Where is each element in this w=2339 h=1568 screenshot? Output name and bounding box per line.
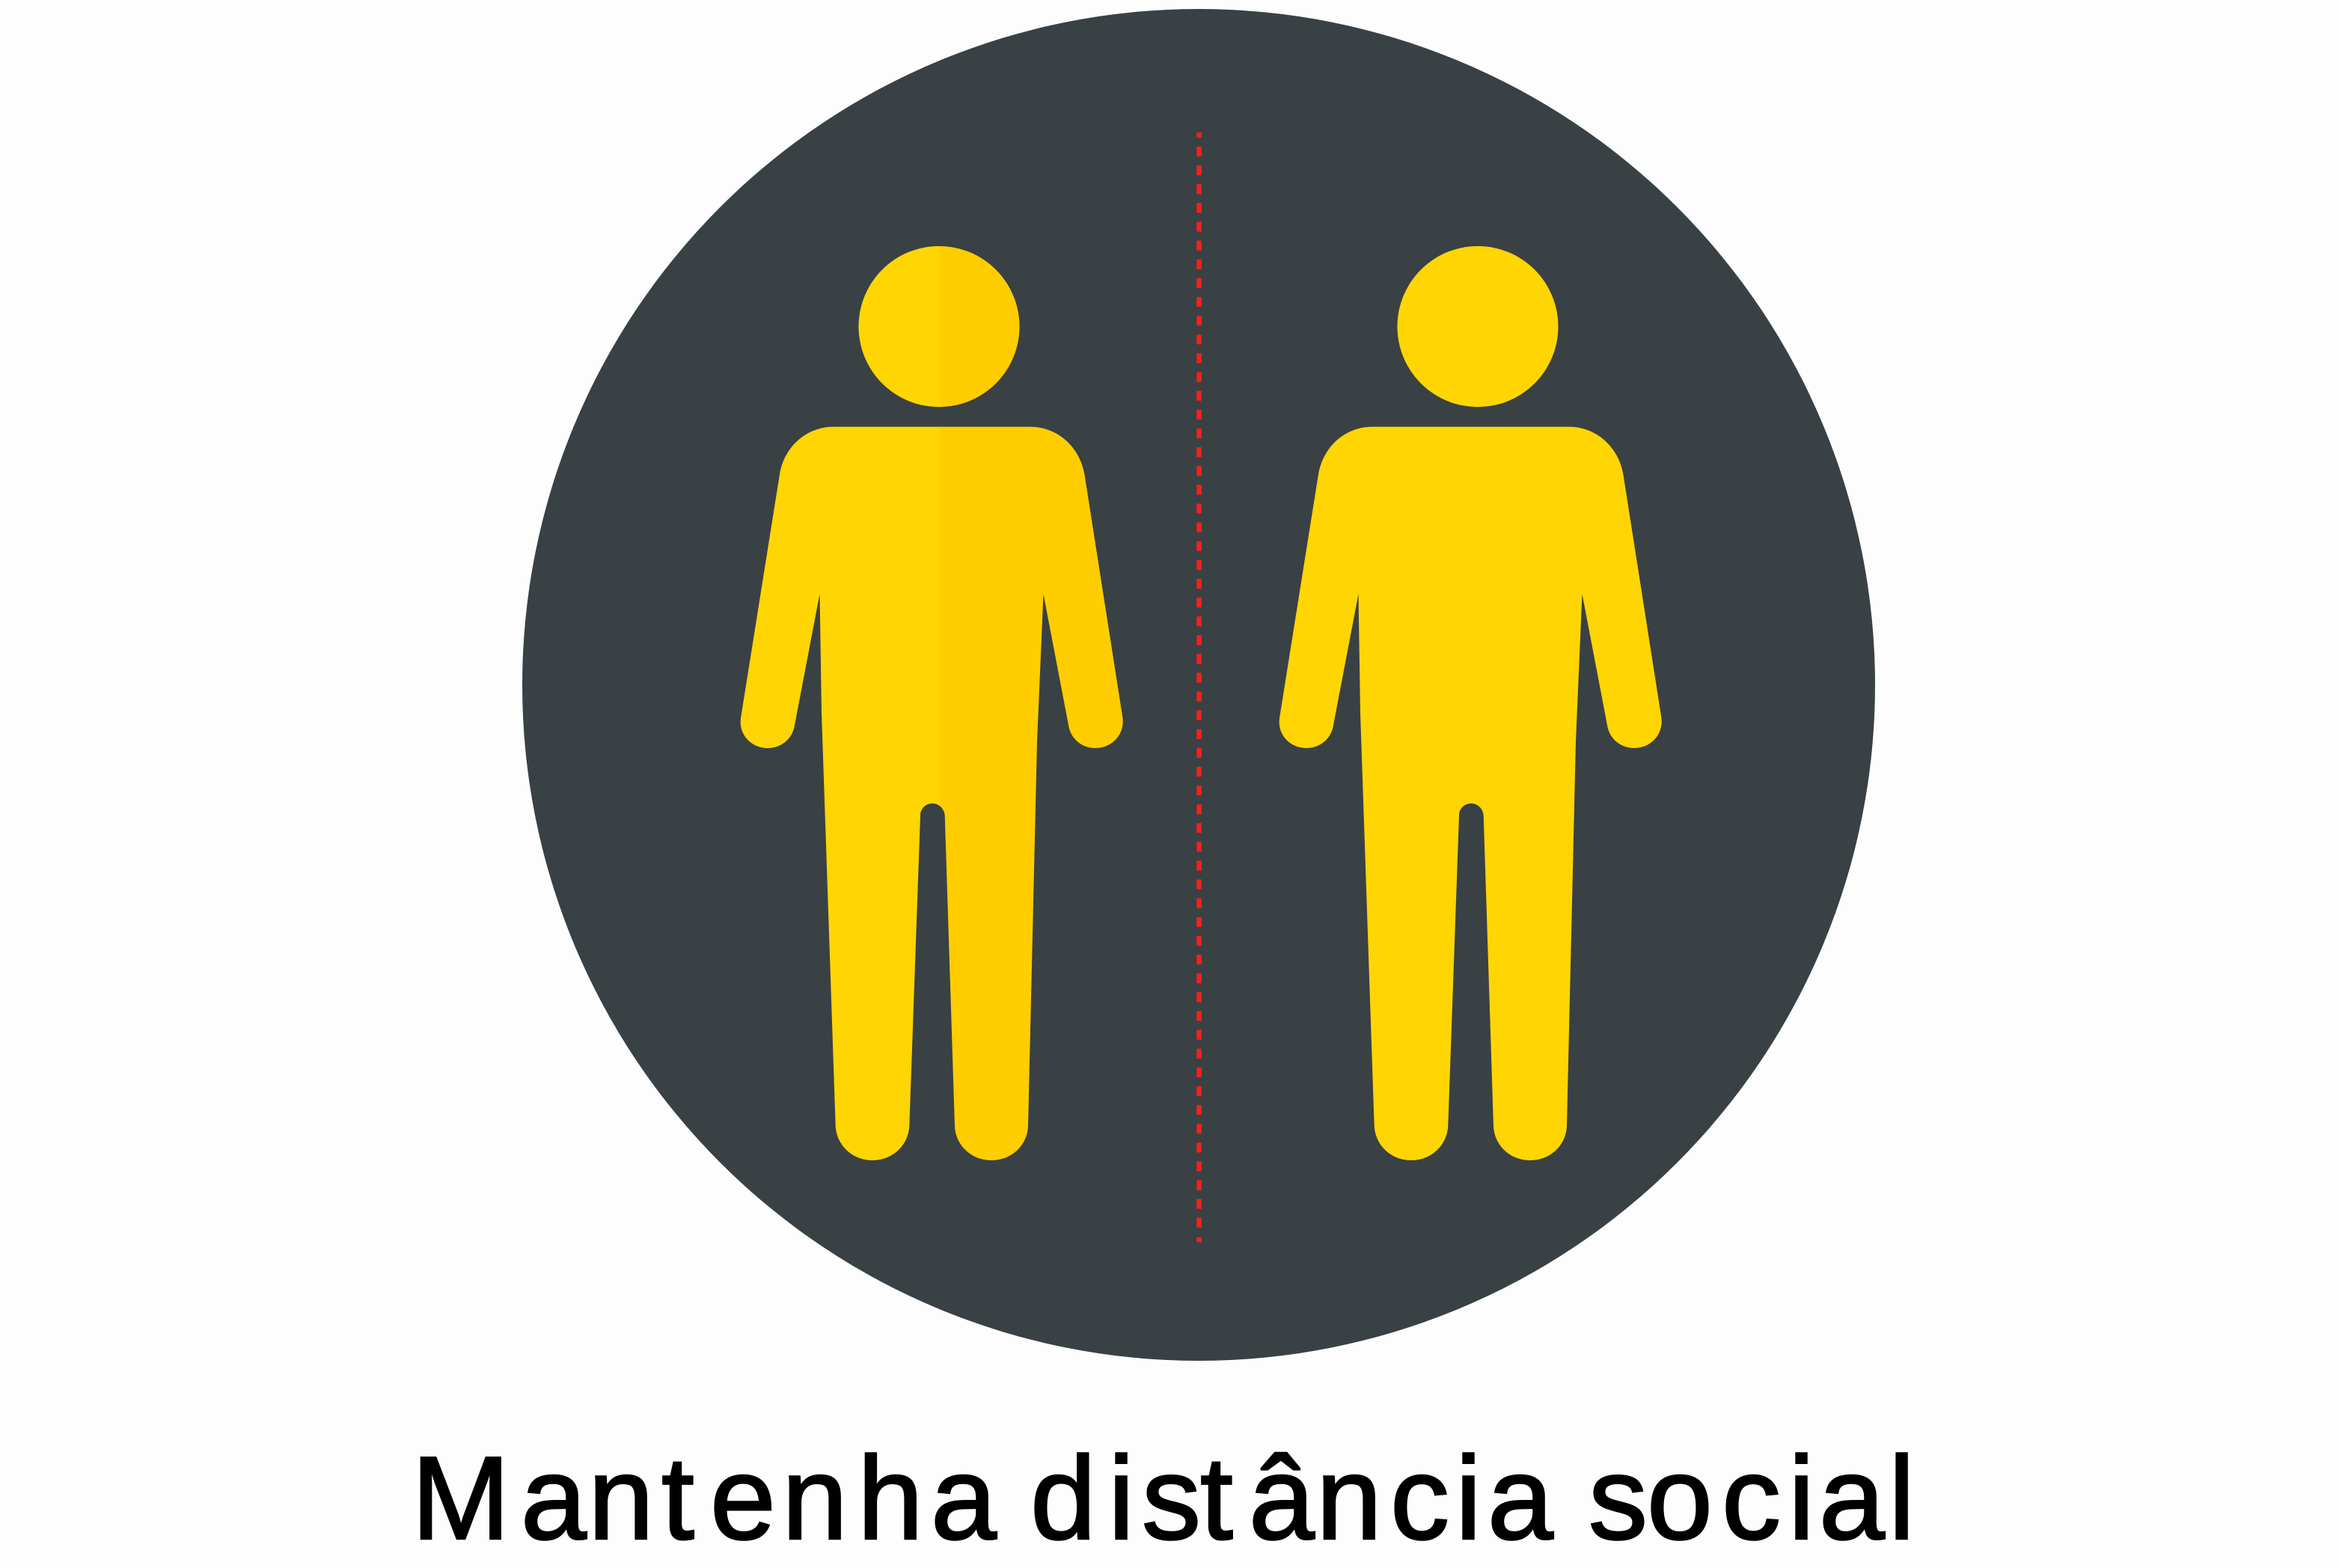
- icon: right person: [1279, 246, 1662, 1160]
- dark circle panel: [522, 9, 1875, 1361]
- right person body: [1279, 426, 1662, 1160]
- title: distância: [1030, 1433, 1553, 1564]
- title: social: [1589, 1433, 1915, 1564]
- icon: left person: [741, 246, 1123, 1160]
- title: Mantenha: [412, 1433, 997, 1564]
- title: [412, 1433, 1915, 1564]
- left person head: [859, 246, 1019, 407]
- red dashed divider line: [1196, 132, 1202, 1242]
- left person body: [741, 426, 1123, 1160]
- right person head: [1398, 246, 1558, 407]
